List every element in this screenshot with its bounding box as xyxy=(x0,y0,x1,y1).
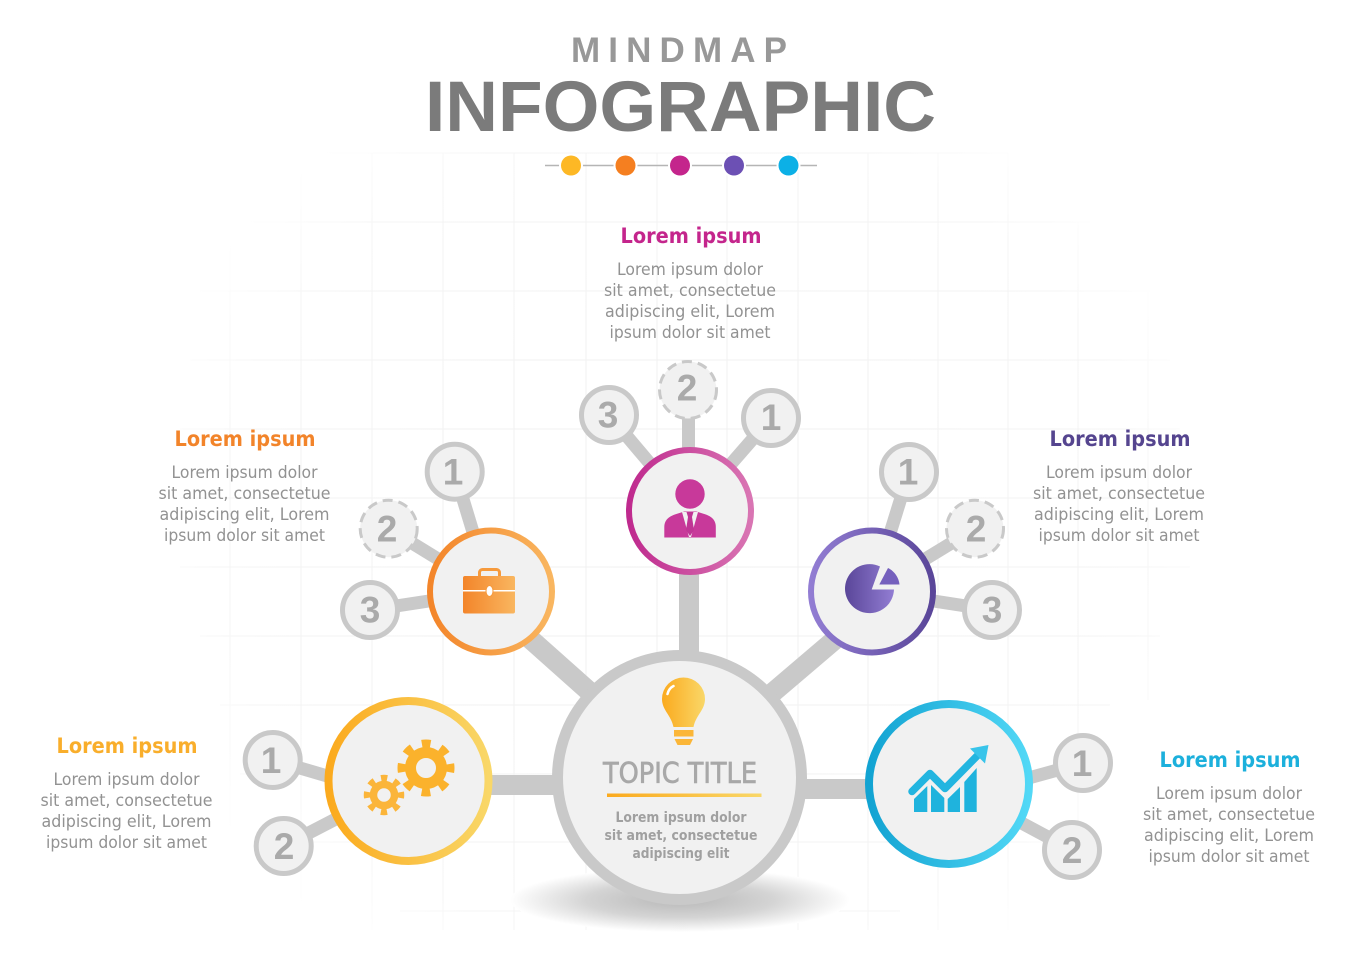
node 2 dashed: 2 xyxy=(377,508,397,550)
heading: Lorem ipsum xyxy=(56,734,198,758)
text block: orange xyxy=(158,427,330,545)
body: sit amet, consectetue xyxy=(1143,805,1315,824)
heading: Lorem ipsum xyxy=(1160,748,1300,772)
topic description xyxy=(604,810,758,862)
panel: orange branch xyxy=(342,444,552,652)
node 3 xyxy=(582,388,636,442)
title underline xyxy=(607,794,762,797)
sub-connectors xyxy=(949,763,1083,850)
magenta ring xyxy=(629,450,751,572)
node 1 xyxy=(245,732,300,788)
body: ipsum dolor sit amet xyxy=(164,526,326,545)
panel: magenta branch xyxy=(582,362,798,572)
subtitle: MINDMAP: MINDMAP xyxy=(571,31,787,70)
node 1: 1 xyxy=(1072,743,1092,784)
purple ring xyxy=(811,530,933,652)
blue ring xyxy=(869,704,1029,864)
body: adipiscing elit, Lorem xyxy=(1034,505,1204,524)
body: adipiscing elit, Lorem xyxy=(605,302,775,321)
node 1: 1 xyxy=(898,452,918,492)
body: adipiscing elit, Lorem xyxy=(1144,826,1314,845)
colour dot timeline xyxy=(545,154,817,178)
node 2 xyxy=(1044,822,1100,878)
node 3 xyxy=(342,582,398,638)
body xyxy=(158,463,330,545)
ground shadow xyxy=(510,868,850,932)
heading: Lorem ipsum xyxy=(174,427,316,451)
topic description: sit amet, consectetue xyxy=(604,828,758,844)
background grid xyxy=(180,153,1190,930)
icon: person xyxy=(664,479,716,538)
node 3: 3 xyxy=(360,590,380,630)
title: INFOGRAPHIC: INFOGRAPHIC xyxy=(425,68,936,147)
body: ipsum dolor sit amet xyxy=(1038,526,1200,545)
body: ipsum dolor sit amet xyxy=(46,833,208,852)
body: adipiscing elit, Lorem xyxy=(42,812,212,831)
node 3: 3 xyxy=(598,394,618,436)
icon: pie chart xyxy=(845,564,900,613)
body xyxy=(1033,463,1205,545)
node 1: 1 xyxy=(443,452,463,492)
node 2 dashed xyxy=(660,362,716,418)
orange ring xyxy=(430,530,552,652)
panel: blue branch xyxy=(869,704,1110,878)
heading: Lorem ipsum xyxy=(1050,427,1190,451)
central circle xyxy=(558,656,802,900)
sub-connectors xyxy=(370,472,491,610)
text block: magenta xyxy=(604,224,776,342)
node 1: 1 xyxy=(761,397,781,438)
icon: briefcase xyxy=(463,570,515,614)
text block: blue xyxy=(1143,748,1315,866)
sub-connectors xyxy=(609,390,771,511)
panel: yellow branch xyxy=(245,701,488,874)
node 2 dashed: 2 xyxy=(677,368,697,408)
heading: Lorem ipsum xyxy=(620,224,762,248)
body: Lorem ipsum dolor xyxy=(54,770,200,789)
node 1 xyxy=(744,390,798,446)
main connectors xyxy=(409,511,949,789)
node 2: 2 xyxy=(274,826,294,867)
body: sit amet, consectetue xyxy=(1033,484,1205,503)
node 2 dashed: 2 xyxy=(966,508,986,550)
body xyxy=(604,260,776,342)
topic description: Lorem ipsum dolor xyxy=(616,810,747,826)
body: ipsum dolor sit amet xyxy=(1148,847,1310,866)
yellow ring xyxy=(328,701,488,861)
node 2 dashed xyxy=(360,500,417,557)
node 2 xyxy=(256,818,311,874)
topic title: TOPIC TITLE xyxy=(602,757,757,790)
body: adipiscing elit, Lorem xyxy=(160,505,330,524)
panel: purple branch xyxy=(811,444,1020,652)
body: ipsum dolor sit amet xyxy=(610,323,771,342)
text block: yellow xyxy=(40,734,212,852)
body xyxy=(40,770,212,852)
node 1: 1 xyxy=(261,740,281,781)
node 3: 3 xyxy=(982,590,1002,630)
body xyxy=(1143,784,1315,866)
body: Lorem ipsum dolor xyxy=(1156,784,1302,803)
body: Lorem ipsum dolor xyxy=(617,260,763,279)
panel: central topic xyxy=(558,656,802,900)
topic description: adipiscing elit xyxy=(632,846,730,862)
body: Lorem ipsum dolor xyxy=(172,463,318,482)
body: Lorem ipsum dolor xyxy=(1046,463,1192,482)
node 1 xyxy=(1056,736,1110,790)
sub-connectors xyxy=(273,760,409,846)
icon: light bulb xyxy=(662,678,705,745)
body: sit amet, consectetue xyxy=(604,281,776,300)
node 3 xyxy=(964,582,1020,638)
icon: growth chart xyxy=(912,745,988,812)
node 2 dashed xyxy=(946,500,1004,557)
text block: purple xyxy=(1033,427,1205,545)
node 1 xyxy=(427,444,482,499)
node 2: 2 xyxy=(1062,830,1082,871)
body: sit amet, consectetue xyxy=(158,484,330,503)
body: sit amet, consectetue xyxy=(40,791,212,810)
icon: gears xyxy=(368,744,450,812)
sub-connectors xyxy=(872,472,992,610)
node 1 xyxy=(882,444,936,500)
